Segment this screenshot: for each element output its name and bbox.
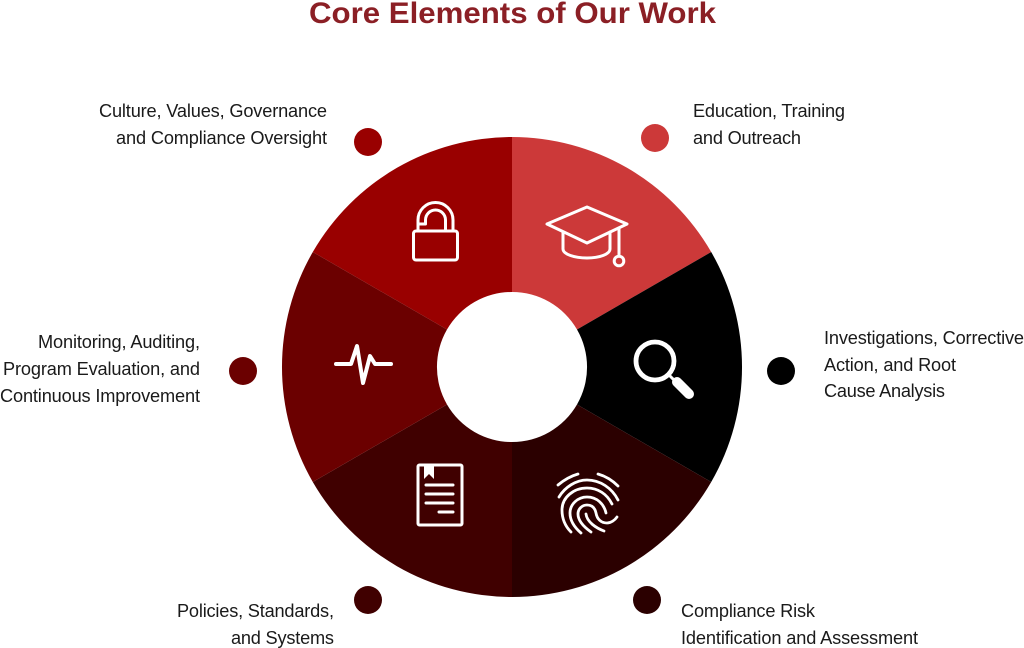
label: culture: Culture, Values, Governance [99,101,327,121]
label: monitoring: Continuous Improvement [0,386,200,406]
marker: investigations [767,357,795,385]
icon: graduation cap [547,207,627,266]
segment: risk [512,404,711,597]
label: monitoring: Monitoring, Auditing, [38,332,200,352]
label: risk: Identification and Assessment [681,628,918,648]
label: investigations: Cause Analysis [824,381,945,401]
icon: pulse line [336,346,391,383]
label: culture: and Compliance Oversight [116,128,327,148]
marker: monitoring [229,357,257,385]
marker: education [641,124,669,152]
label: risk: Compliance Risk [681,601,816,621]
label: investigations: Action, and Root [824,355,956,375]
wheel diagram [282,137,742,597]
label: policies: and Systems [231,628,334,648]
icon: fingerprint [558,474,618,533]
label: education: and Outreach [693,128,801,148]
segment: education [512,137,711,330]
label: investigations: Investigations, Corrective [824,328,1024,348]
icon: open padlock [414,202,458,260]
segment: culture [313,137,512,330]
segment: monitoring [282,252,447,482]
label: education: Education, Training [693,101,845,121]
label: policies: Policies, Standards, [177,601,334,621]
marker: policies [354,586,382,614]
segment: investigations [577,252,742,482]
segment: policies [313,404,512,597]
label: monitoring: Program Evaluation, and [3,359,200,379]
marker: risk [633,586,661,614]
marker: culture [354,128,382,156]
icon: magnifying glass [636,342,689,394]
icon: document with bookmark [418,465,462,525]
